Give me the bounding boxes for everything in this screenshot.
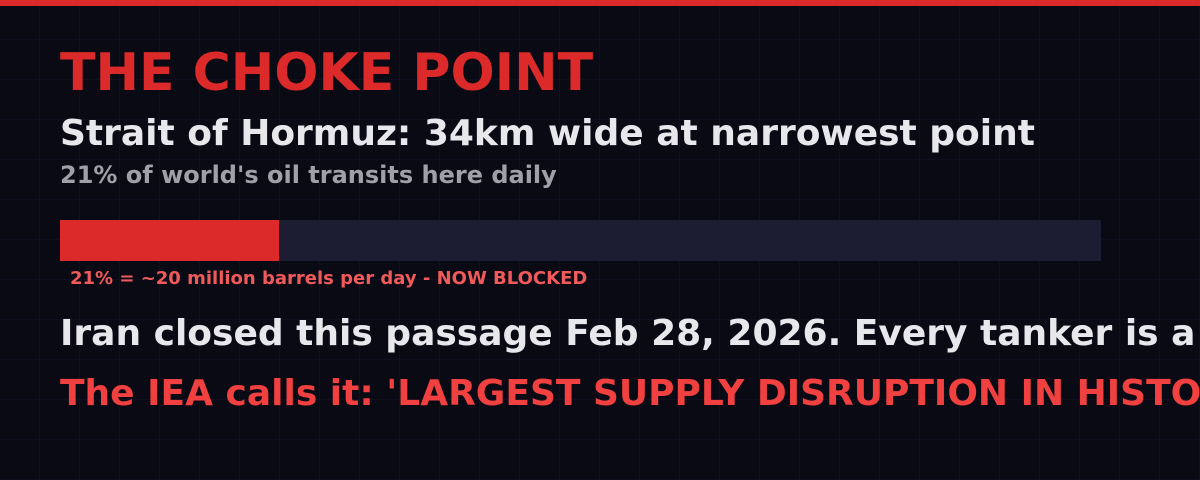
bar label: 21% = ~20 million barrels per day - NOW BLOCKED <box>70 268 587 289</box>
stat text: 21% of world's oil transits here daily <box>60 161 557 189</box>
top accent bar <box>0 0 1200 6</box>
subtitle: Strait of Hormuz: 34km wide at narrowest point <box>60 113 1035 154</box>
title: THE CHOKE POINT <box>60 43 594 103</box>
bar chart: oil share <box>60 220 1101 261</box>
